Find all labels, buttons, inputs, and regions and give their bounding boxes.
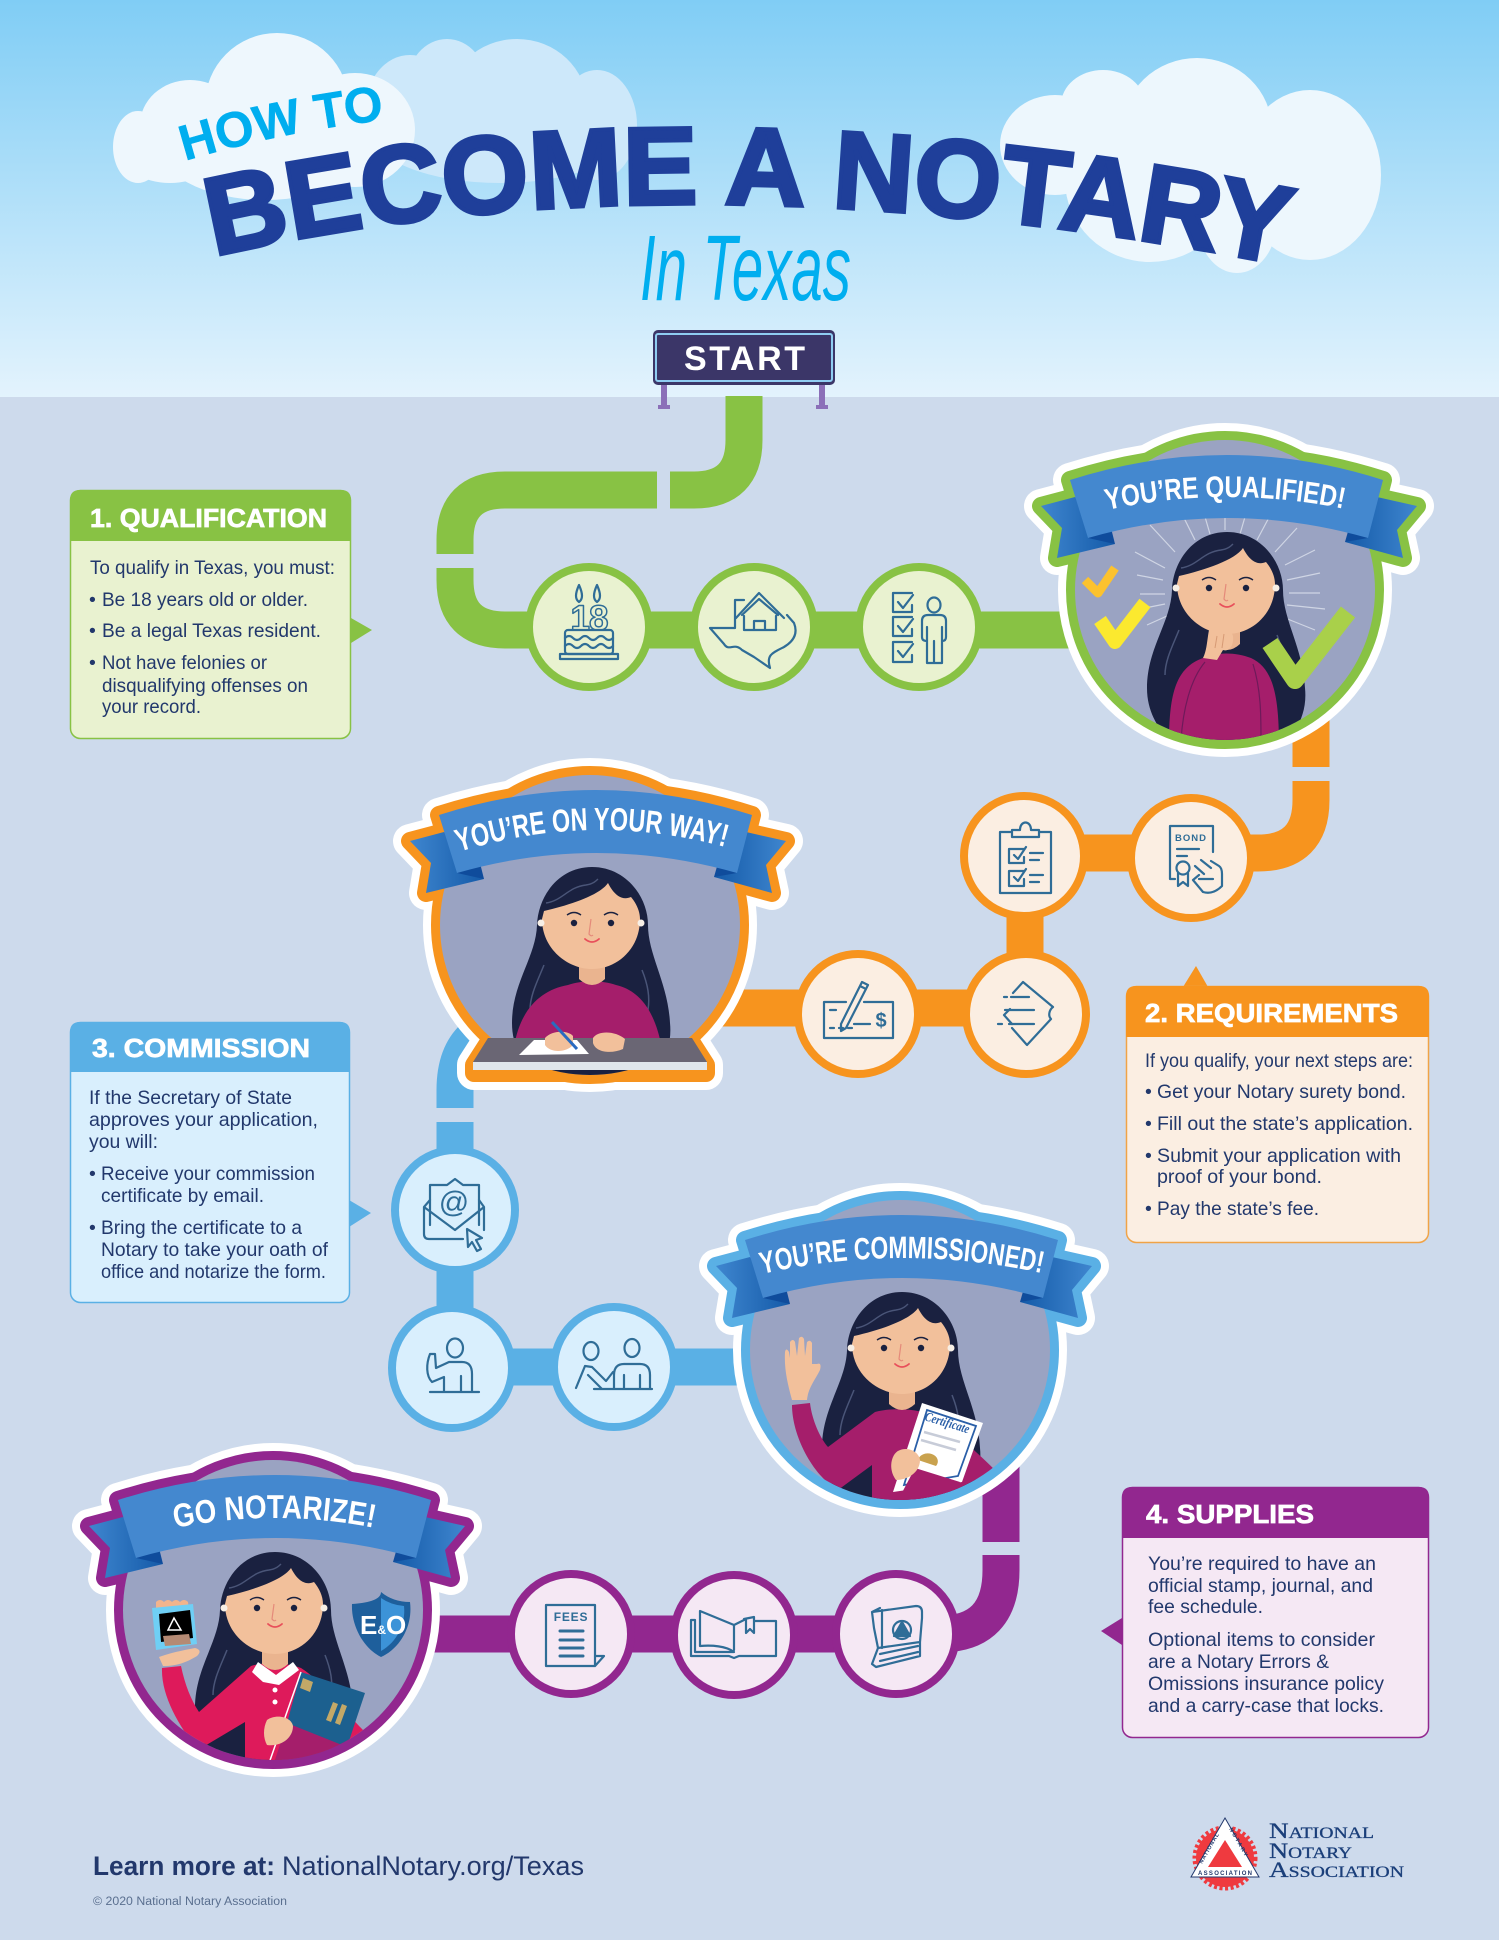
- ribbon: YOU’RE QUALIFIED!: [1103, 476, 1345, 509]
- body text: If you qualify, your next steps are:: [1145, 1050, 1413, 1072]
- ribbon: YOU’RE ON YOUR WAY!: [453, 808, 729, 850]
- body text: approves your application,: [89, 1109, 318, 1131]
- body text: fee schedule.: [1148, 1596, 1263, 1618]
- icon: application form: [966, 954, 1086, 1074]
- panel: 3 commission: [70, 1022, 371, 1302]
- body text: •: [1145, 1081, 1152, 1103]
- icon: email certificate: [395, 1150, 515, 1270]
- body text: official stamp, journal, and: [1148, 1575, 1373, 1597]
- icon: clipboard: [964, 796, 1084, 916]
- ribbon: [716, 1215, 1092, 1318]
- body text: and a carry-case that locks.: [1148, 1695, 1384, 1717]
- body text: certificate by email.: [101, 1185, 264, 1207]
- ribbon: [1041, 455, 1417, 558]
- footer: learn more: NationalNotary.org/Texas: [282, 1851, 584, 1881]
- body text: Omissions insurance policy: [1148, 1673, 1384, 1695]
- icon: bond: [1131, 798, 1251, 918]
- body text: If the Secretary of State: [89, 1087, 292, 1109]
- body text: Be a legal Texas resident.: [102, 620, 321, 642]
- body text: Notary to take your oath of: [101, 1239, 329, 1261]
- body text: [1148, 1553, 1384, 1717]
- body text: Optional items to consider: [1148, 1629, 1375, 1651]
- heading: 4. SUPPLIES: [1146, 1499, 1314, 1529]
- cloud: right: [1000, 58, 1381, 273]
- path: orange: [700, 715, 1311, 1008]
- desk: [473, 1022, 707, 1070]
- icon: fee schedule: [511, 1574, 631, 1694]
- title: become a notary: BECOME A NOTARY: [203, 126, 1300, 262]
- body text: •: [89, 1217, 96, 1239]
- body text: Fill out the state’s application.: [1157, 1113, 1413, 1135]
- icon: cheque and pen: $: [875, 1010, 887, 1032]
- logo: national notary association: [1191, 1818, 1405, 1888]
- footer: copyright: © 2020 National Notary Association: [93, 1896, 287, 1908]
- footer: learn more: Learn more at:: [93, 1851, 275, 1881]
- illustration: woman at desk: [512, 867, 670, 1081]
- body text: disqualifying offenses on: [102, 675, 308, 697]
- body text: [1145, 1050, 1413, 1220]
- body text: •: [1145, 1113, 1152, 1135]
- icon: texas house: [694, 567, 814, 687]
- body text: Get your Notary surety bond.: [1157, 1081, 1406, 1103]
- body text: are a Notary Errors &: [1148, 1651, 1329, 1673]
- badge: go notarize: [72, 1443, 482, 1777]
- heading: 1. QUALIFICATION: [90, 503, 327, 533]
- body text: Not have felonies or: [102, 652, 267, 674]
- panel: 2 requirements: [1126, 966, 1429, 1242]
- icon: bond: BOND: [1175, 833, 1207, 844]
- path: green: [455, 396, 1090, 630]
- body text: •: [1145, 1198, 1152, 1220]
- logo wordmark: ASSOCIATION: [1269, 1857, 1405, 1882]
- icon: checklist person: [859, 567, 979, 687]
- body text: •: [89, 589, 96, 611]
- badge: you're qualified: [1024, 423, 1434, 757]
- panel: 4 supplies: [1101, 1487, 1429, 1738]
- icon: email certificate: @: [439, 1186, 469, 1219]
- body text: •: [89, 620, 96, 642]
- icon: birthday cake 18: 18: [571, 599, 608, 638]
- logo seal: [1191, 1818, 1259, 1888]
- body text: Receive your commission: [101, 1163, 315, 1185]
- body text: Bring the certificate to a: [101, 1217, 302, 1239]
- illustration: woman with certificate: [785, 1292, 1000, 1506]
- body text: you will:: [89, 1131, 158, 1153]
- body text: Pay the state’s fee.: [1157, 1198, 1319, 1220]
- start sign: START: [684, 340, 805, 378]
- body text: •: [1145, 1145, 1152, 1167]
- sky: [0, 0, 1499, 397]
- path: blue: [455, 1020, 760, 1367]
- body text: To qualify in Texas, you must:: [90, 557, 335, 579]
- body text: office and notarize the form.: [101, 1261, 326, 1283]
- heading: 3. COMMISSION: [92, 1033, 310, 1063]
- logo seal: ASSOCIATION: [1198, 1871, 1252, 1877]
- body text: proof of your bond.: [1157, 1166, 1322, 1188]
- icon: birthday cake 18: [529, 567, 649, 687]
- cloud: back left: [365, 39, 637, 183]
- start sign: [653, 330, 835, 409]
- illustration: woman with certificate: Certificate: [923, 1409, 972, 1436]
- logo seal: NATIONAL: [1199, 1832, 1221, 1865]
- badge: you're commissioned: [699, 1183, 1109, 1517]
- title: in texas: In Texas: [640, 217, 851, 320]
- illustration: woman with stamp and journal: E&O: [360, 1610, 406, 1640]
- logo seal: NOTARY: [1227, 1827, 1249, 1858]
- body text: You’re required to have an: [1148, 1553, 1376, 1575]
- ribbon: GO NOTARIZE!: [174, 1495, 376, 1528]
- illustration: woman with stamp and journal: [152, 1552, 410, 1766]
- body text: •: [89, 1163, 96, 1185]
- icon: notary stamp: [836, 1574, 956, 1694]
- icon: cheque and pen: [798, 954, 918, 1074]
- icon: notary signing: [554, 1307, 674, 1427]
- ribbon: [410, 790, 786, 893]
- logo wordmark: NOTARY: [1269, 1838, 1353, 1863]
- body text: Submit your application with: [1157, 1145, 1401, 1167]
- ribbon: [89, 1475, 465, 1578]
- body text: your record.: [102, 696, 201, 718]
- body text: •: [89, 652, 96, 674]
- body text: [89, 557, 335, 718]
- path: purple: [400, 1450, 1001, 1634]
- cloud: front left: [113, 33, 415, 200]
- illustration: thinking woman: [1085, 505, 1348, 746]
- badge: you're on your way: [393, 758, 803, 1092]
- title: how to: HOW TO: [178, 87, 381, 160]
- icon: journal: [674, 1575, 794, 1695]
- logo wordmark: [1269, 1818, 1405, 1882]
- panel: 1 qualification: [70, 490, 372, 738]
- body text: Be 18 years old or older.: [102, 589, 308, 611]
- icon: fee schedule: FEES: [554, 1610, 588, 1624]
- icon: raised hand oath: [392, 1308, 512, 1428]
- body text: [89, 1087, 329, 1283]
- title: [178, 87, 1300, 320]
- logo wordmark: NATIONAL: [1269, 1818, 1374, 1843]
- heading: 2. REQUIREMENTS: [1145, 998, 1398, 1028]
- ribbon: YOU’RE COMMISSIONED!: [758, 1236, 1044, 1273]
